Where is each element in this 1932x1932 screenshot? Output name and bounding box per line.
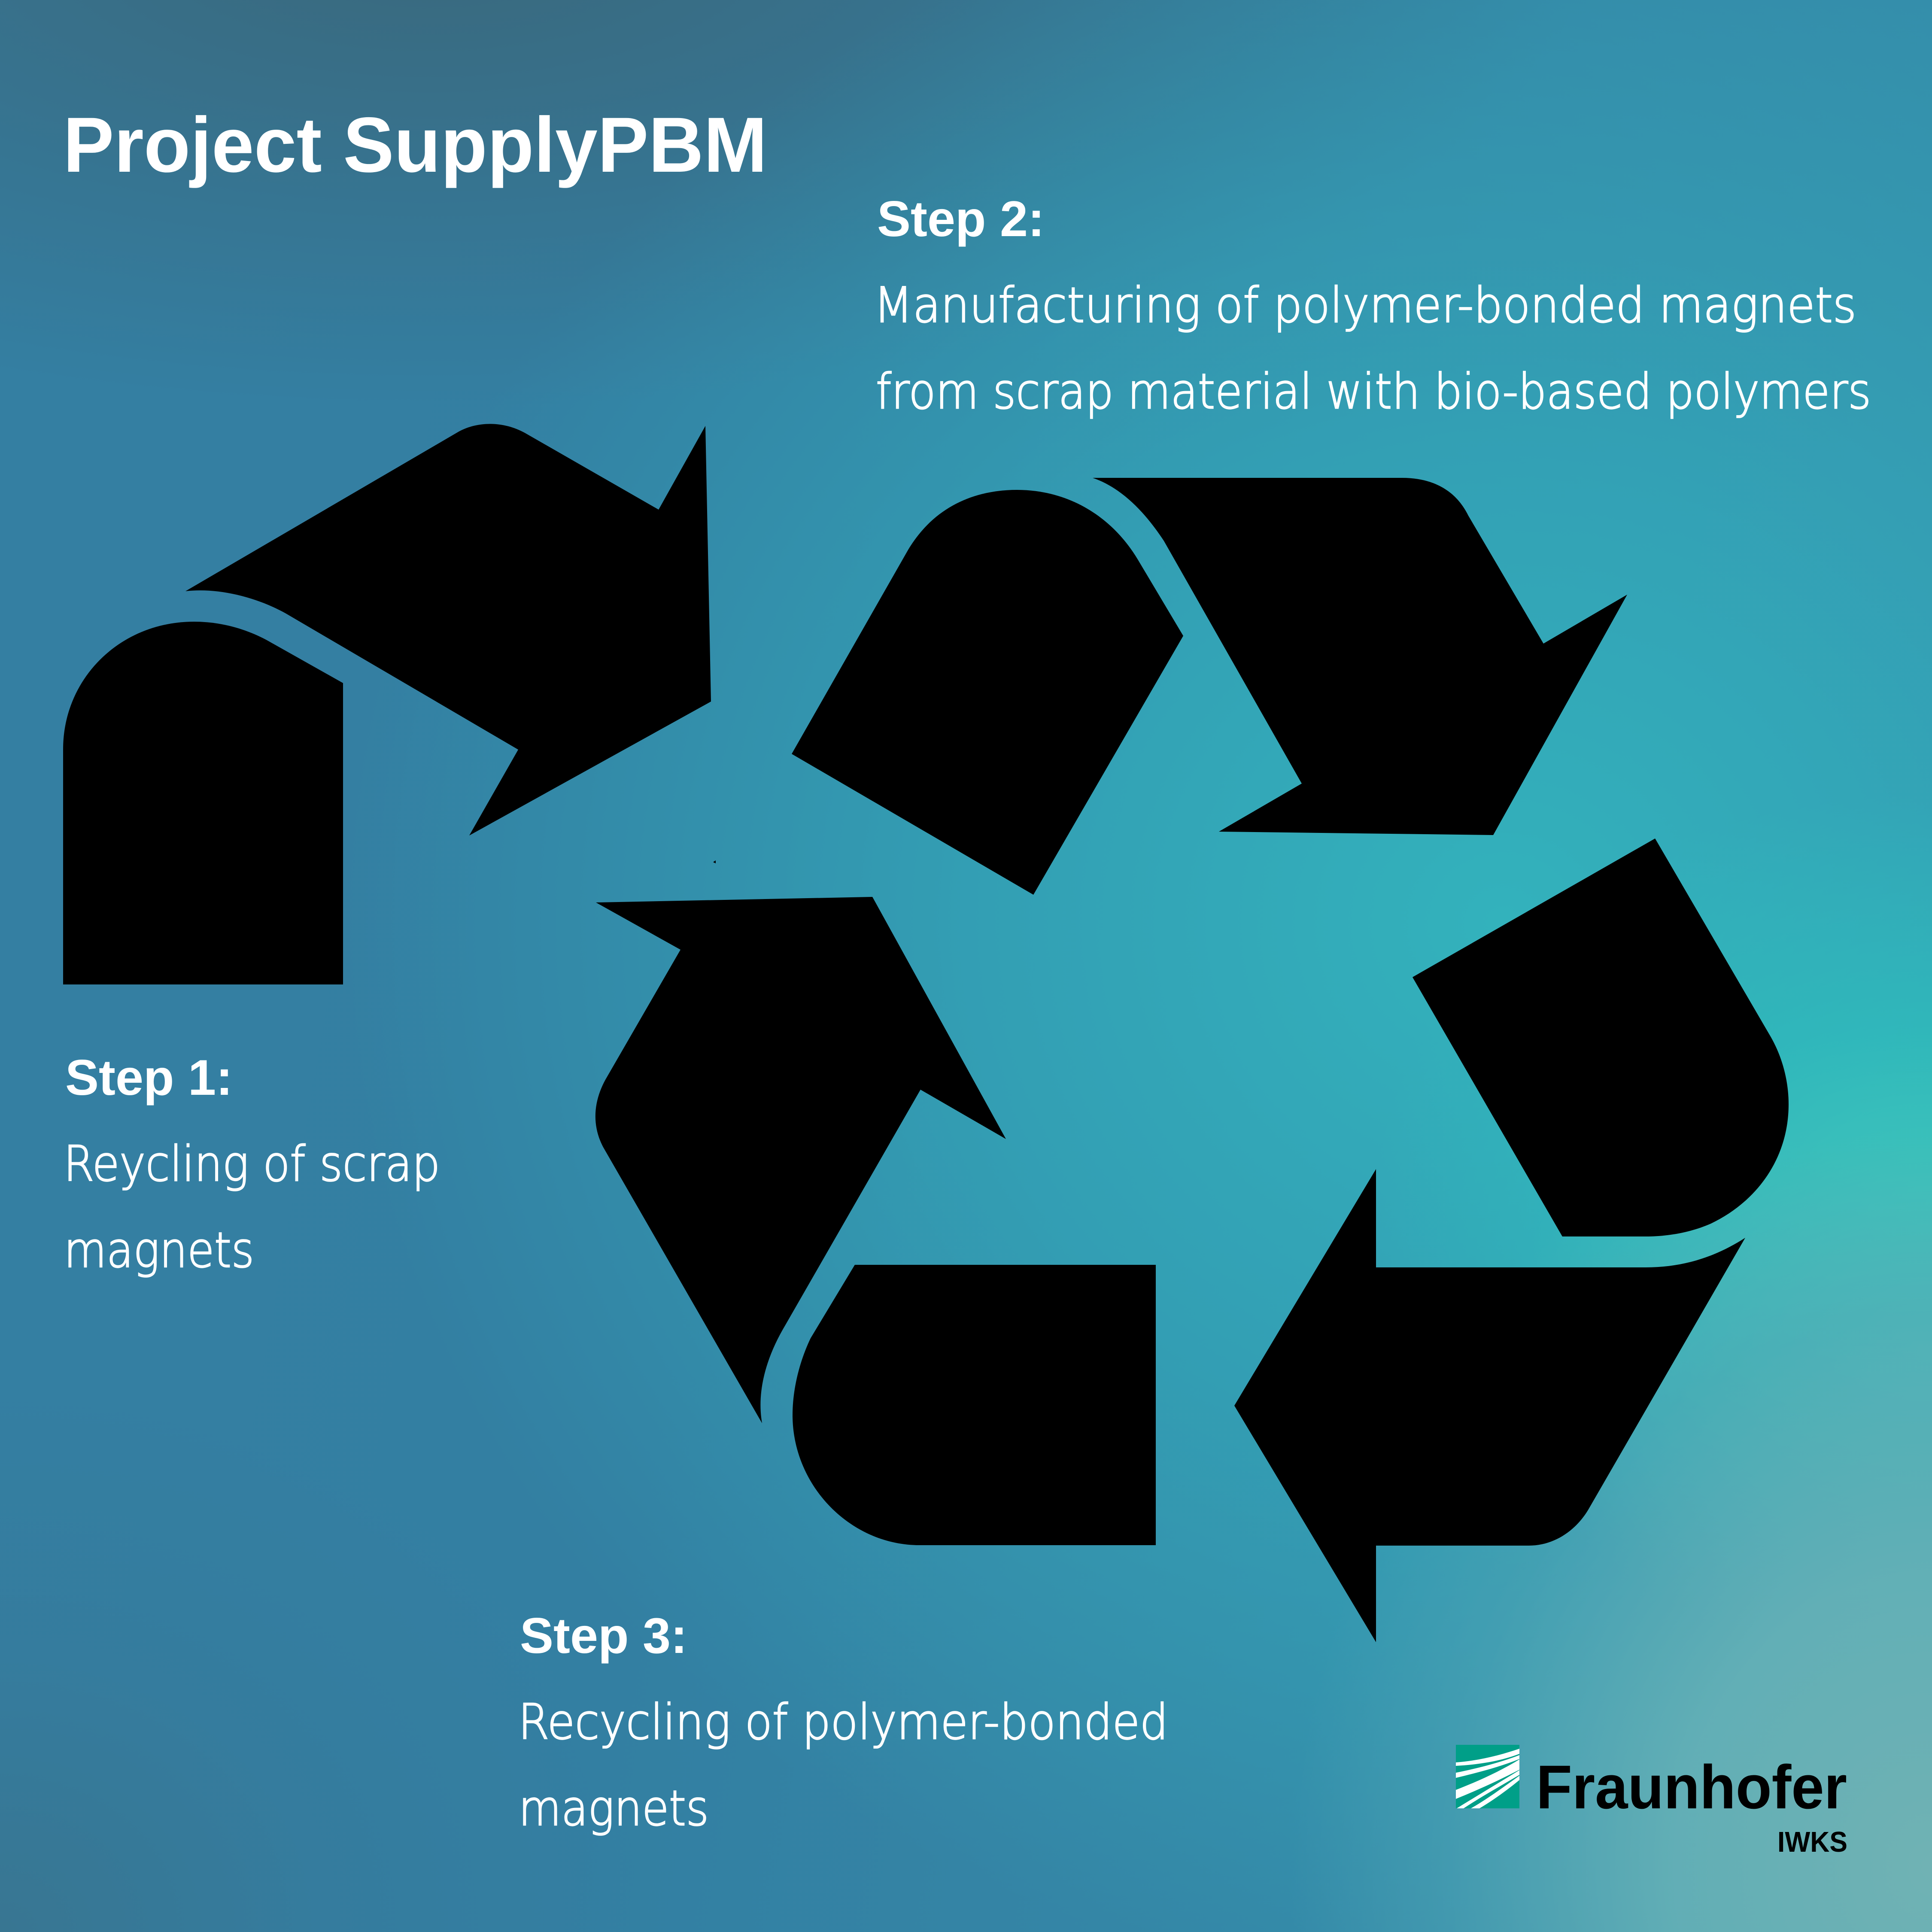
block: bottom tail bbox=[793, 1265, 1156, 1545]
text block: step 3 bbox=[518, 1607, 1168, 1837]
step 2 description line 1: Manufacturing of polymer-bonded magnets bbox=[874, 277, 1856, 334]
logo wordmark: Fraunhofer bbox=[1536, 1753, 1847, 1822]
arrow: step 2 to step 3 bbox=[1093, 478, 1627, 835]
text block: step 1 bbox=[64, 1049, 440, 1279]
step 1 heading: Step 1: bbox=[65, 1049, 233, 1106]
step 3 description line 2: magnets bbox=[519, 1780, 709, 1837]
logo institute name: IWKS bbox=[1777, 1826, 1847, 1858]
step 1 description line 1: Reycling of scrap bbox=[64, 1136, 440, 1192]
title: Project SupplyPBM bbox=[63, 101, 767, 188]
block: step 2 tail bbox=[792, 490, 1183, 895]
step 1 description line 2: magnets bbox=[64, 1222, 254, 1279]
logo mark bbox=[1456, 1745, 1519, 1808]
arrow: step 1 to step 2 bbox=[185, 424, 711, 835]
block: right tail bbox=[1413, 838, 1789, 1236]
logo: Fraunhofer IWKS bbox=[1456, 1745, 1847, 1858]
block: step 1 tail bbox=[63, 622, 343, 984]
arrow: right to bottom bbox=[1234, 1169, 1745, 1642]
step 2 heading: Step 2: bbox=[877, 191, 1045, 247]
step 3 heading: Step 3: bbox=[520, 1607, 687, 1664]
stray speck bbox=[713, 860, 716, 863]
step 3 description line 1: Recycling of polymer-bonded bbox=[518, 1694, 1168, 1750]
arrow: bottom to top bbox=[595, 897, 1006, 1423]
text block: step 2 bbox=[874, 191, 1871, 420]
recycling symbol bbox=[63, 424, 1789, 1642]
